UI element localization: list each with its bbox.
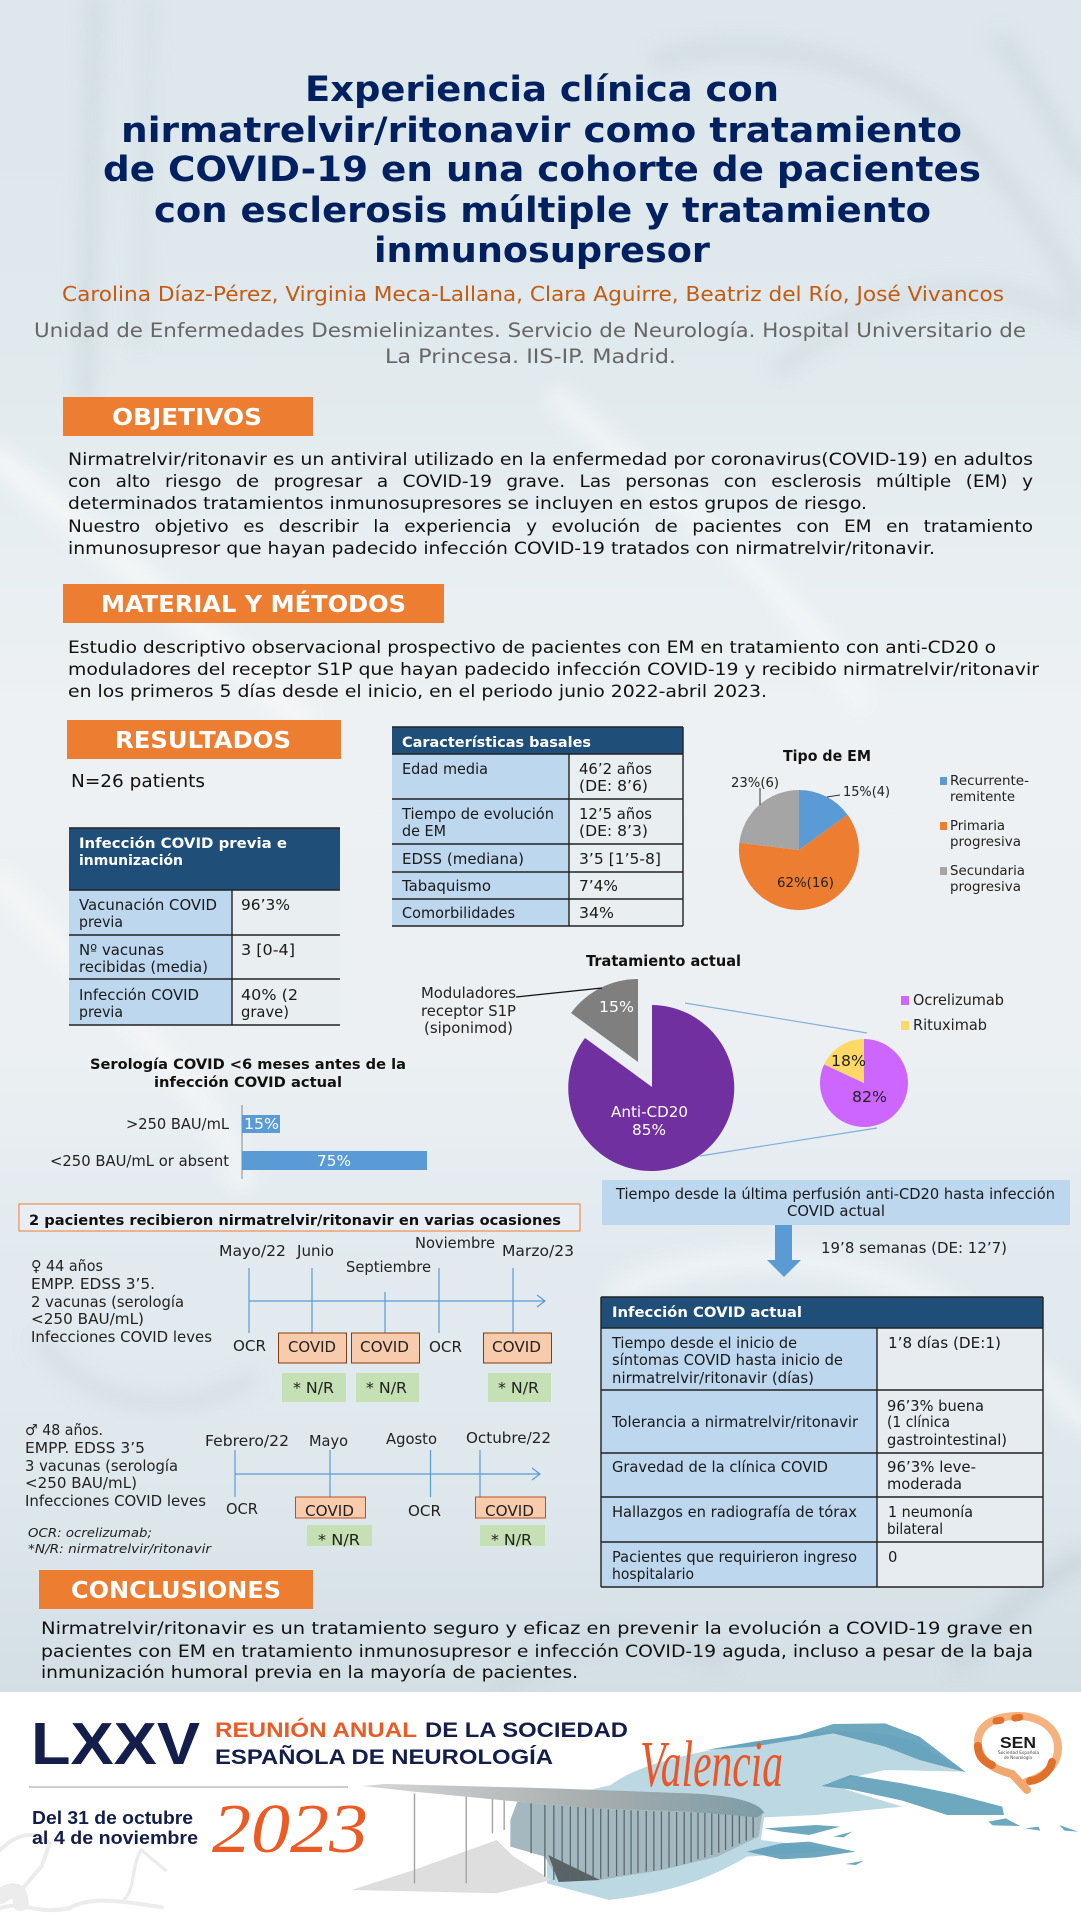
heading: objetivos: OBJETIVOS bbox=[112, 405, 262, 431]
patient 1 details bbox=[31, 1257, 212, 1346]
pie chart: tratamiento actual: receptor S1P bbox=[421, 1002, 516, 1020]
table: infección COVID previa e inmunización: inmunización bbox=[79, 852, 183, 869]
banner: congress footer bbox=[0, 1692, 1081, 1920]
year: 2023: 2023 bbox=[212, 1791, 368, 1868]
timeline: patient 1: OCR bbox=[233, 1337, 266, 1355]
patient 1 details: 2 vacunas (serología bbox=[31, 1293, 184, 1311]
callout: tiempo desde la última perfusión: COVID actual bbox=[787, 1203, 885, 1220]
table: características basales: Tabaquismo bbox=[401, 878, 491, 895]
table: características basales: Edad media bbox=[402, 761, 488, 778]
table: características basales: 12’5 años bbox=[579, 806, 652, 823]
timeline: patient 2: OCR bbox=[226, 1500, 258, 1518]
table: infección COVID actual bbox=[601, 1297, 1043, 1587]
result: semanas: 19’8 semanas (DE: 12’7) bbox=[821, 1239, 1007, 1257]
pie chart: tratamiento actual: 18% bbox=[831, 1052, 866, 1070]
text: conclusiones: pacientes con EM en tratamiento inmunosupresor e infección COVID-19 aguda, incluso a pesar de la baja bbox=[41, 1642, 1033, 1662]
heading: reunión anual: REUNIÓN ANUAL bbox=[215, 1718, 417, 1742]
affiliation: Unidad de Enfermedades Desmielinizantes. Servicio de Neurología. Hospital Universitario de bbox=[34, 319, 1026, 342]
timeline: patient 2: Mayo bbox=[309, 1432, 348, 1450]
table: infección COVID actual: Hallazgos en radiografía de tórax bbox=[612, 1504, 857, 1521]
timeline: patient 2: Agosto bbox=[386, 1430, 437, 1448]
text: objetivos: Nirmatrelvir/ritonavir es un antiviral utilizado en la enfermedad por coronavirus(COVID-19) en adultos bbox=[68, 450, 1033, 470]
pie chart: tratamiento actual: Rituximab bbox=[913, 1016, 987, 1034]
text: conclusiones: Nirmatrelvir/ritonavir es un tratamiento seguro y eficaz en prevenir la evolución a COVID-19 grave en bbox=[41, 1619, 1033, 1639]
heading: resultados: RESULTADOS bbox=[115, 728, 291, 754]
heading: reunión anual: ESPAÑOLA DE NEUROLOGÍA bbox=[215, 1746, 553, 1769]
heading: material y métodos: MATERIAL Y MÉTODOS bbox=[101, 590, 406, 618]
title: con esclerosis múltiple y tratamiento bbox=[154, 191, 931, 231]
callout: varias ocasiones bbox=[19, 1204, 580, 1231]
affiliation: La Princesa. IIS-IP. Madrid. bbox=[385, 345, 676, 368]
illustration: building bbox=[352, 1784, 764, 1893]
bar chart: serología COVID: 15% bbox=[244, 1115, 279, 1133]
table: características basales: Tiempo de evolución bbox=[401, 806, 554, 823]
title: inmunosupresor bbox=[374, 231, 711, 271]
timeline: patient 1: COVID bbox=[360, 1338, 409, 1356]
text: objetivos: con alto riesgo de progresar a COVID-19 grave. Las personas con esclerosis múltiple (EM) y bbox=[68, 472, 1033, 492]
table: infección COVID actual: Tolerancia a nirmatrelvir/ritonavir bbox=[611, 1414, 859, 1431]
table: características basales: (DE: 8’3) bbox=[579, 823, 648, 840]
dates: Del 31 de octubre bbox=[32, 1808, 193, 1828]
pie chart: tipo de EM bbox=[731, 747, 1029, 910]
text: objetivos: determinados tratamientos inmunosupresores se incluyen en estos grupos de riesgo. bbox=[68, 494, 867, 514]
timeline: patient 1: COVID bbox=[492, 1338, 541, 1356]
timeline: patient 1: Mayo/22 bbox=[219, 1242, 286, 1260]
table: infección COVID actual: Tiempo desde el inicio de bbox=[611, 1335, 797, 1352]
timeline: patient 2: Febrero/22 bbox=[205, 1432, 289, 1450]
bar chart: serología COVID: Serología COVID <6 meses antes de la bbox=[90, 1056, 406, 1073]
patient 2 details: EMPP. EDSS 3’5 bbox=[25, 1439, 145, 1457]
timeline: patient 2: Octubre/22 bbox=[466, 1429, 551, 1447]
bar chart: serología COVID bbox=[50, 1056, 427, 1179]
patient 2 details: 3 vacunas (serología bbox=[25, 1457, 178, 1475]
table: infección COVID previa e inmunización: recibidas (media) bbox=[79, 959, 208, 976]
table: infección COVID actual: gastrointestinal) bbox=[887, 1432, 1007, 1449]
table: características basales: 3’5 [1’5-8] bbox=[579, 851, 661, 868]
heading: conclusiones: CONCLUSIONES bbox=[71, 1578, 281, 1604]
table: infección COVID actual: hospitalario bbox=[612, 1566, 694, 1583]
table: características basales: 46’2 años bbox=[579, 761, 652, 778]
text: material y métodos: moduladores del receptor S1P que hayan padecido infección COVID-19 y recibido nirmatrelvir/ritonavir bbox=[68, 660, 1039, 680]
table: infección COVID actual: 1 neumonía bbox=[888, 1504, 973, 1521]
timeline: patient 1: Junio bbox=[296, 1242, 334, 1260]
table: características basales: de EM bbox=[402, 823, 446, 840]
patient 1 details: Infecciones COVID leves bbox=[31, 1328, 212, 1346]
table: infección COVID actual: Infección COVID actual bbox=[612, 1304, 802, 1321]
callout: tiempo desde la última perfusión bbox=[602, 1180, 1070, 1225]
table: infección COVID previa e inmunización: Vacunación COVID bbox=[79, 897, 217, 914]
pie chart: tratamiento actual: 85% bbox=[632, 1121, 666, 1139]
heading: resultados bbox=[67, 720, 341, 759]
pie chart: tratamiento actual: Tratamiento actual bbox=[586, 952, 741, 970]
text: material y métodos: Estudio descriptivo observacional prospectivo de pacientes con EM en tratamiento con anti-CD20 o bbox=[68, 638, 996, 658]
text: conclusiones bbox=[41, 1619, 1033, 1683]
timeline: patient 1: * N/R bbox=[498, 1379, 539, 1397]
title: Experiencia clínica con bbox=[305, 70, 779, 110]
pie chart: tipo de EM: 23%(6) bbox=[731, 776, 779, 791]
patient 1 details: <250 BAU/mL) bbox=[31, 1310, 144, 1328]
table: infección COVID previa e inmunización: 40% (2 bbox=[241, 987, 298, 1004]
dates: al 4 de noviembre bbox=[32, 1828, 198, 1848]
pie chart: tipo de EM: progresiva bbox=[950, 880, 1021, 895]
timeline: patient 1: COVID bbox=[288, 1338, 336, 1356]
table: características basales: EDSS (mediana) bbox=[402, 851, 524, 868]
heading: conclusiones bbox=[39, 1570, 313, 1609]
pie chart: tipo de EM: Recurrente- bbox=[950, 774, 1029, 789]
patient 1 details: ♀ 44 años bbox=[31, 1257, 103, 1275]
timeline: patient 2: COVID bbox=[305, 1502, 354, 1520]
illustration: watercolor bbox=[547, 1723, 1078, 1900]
logo: SEN bbox=[978, 1716, 1058, 1790]
patient 1 details: EMPP. EDSS 3’5. bbox=[31, 1275, 155, 1293]
dates bbox=[32, 1808, 198, 1848]
pie chart: tratamiento actual: 15% bbox=[599, 998, 634, 1016]
text: conclusiones: inmunización humoral previa en la mayoría de pacientes. bbox=[41, 1663, 578, 1683]
heading: material y métodos bbox=[63, 584, 444, 623]
title bbox=[103, 70, 981, 271]
pie chart: tipo de EM: remitente bbox=[950, 790, 1015, 805]
timeline: patient 2: * N/R bbox=[318, 1531, 360, 1549]
table: infección COVID actual: 96’3% leve- bbox=[887, 1459, 976, 1476]
timeline: patient 1: OCR bbox=[429, 1338, 462, 1356]
bar chart: serología COVID: <250 BAU/mL or absent bbox=[50, 1152, 229, 1170]
timeline: patient 1: * N/R bbox=[293, 1379, 334, 1397]
bar chart: serología COVID: >250 BAU/mL bbox=[126, 1115, 230, 1133]
text: material y métodos: en los primeros 5 días desde el inicio, en el periodo junio 2022-abril 2023. bbox=[68, 682, 767, 702]
callout: varias ocasiones: 2 pacientes recibieron nirmatrelvir/ritonavir en varias ocasiones bbox=[29, 1212, 561, 1229]
heading: reunión anual: DE LA SOCIEDAD bbox=[425, 1719, 628, 1742]
table: infección COVID actual: Gravedad de la clínica COVID bbox=[612, 1459, 828, 1476]
pie chart: tratamiento actual: Anti-CD20 bbox=[611, 1103, 688, 1121]
pie chart: tipo de EM: progresiva bbox=[950, 835, 1021, 850]
table: infección COVID previa e inmunización: Infección COVID previa e bbox=[79, 835, 287, 852]
text: objetivos: Nuestro objetivo es describir la experiencia y evolución de pacientes con EM en tratamiento bbox=[68, 517, 1033, 537]
table: características basales bbox=[392, 727, 683, 926]
table: infección COVID previa e inmunización: grave) bbox=[241, 1004, 289, 1021]
table: infección COVID previa e inmunización: Infección COVID bbox=[79, 987, 199, 1004]
table: infección COVID previa e inmunización: Nº vacunas bbox=[79, 942, 164, 959]
footnote: abbreviations bbox=[28, 1525, 212, 1556]
heading: reunión anual bbox=[215, 1718, 628, 1769]
authors: Carolina Díaz-Pérez, Virginia Meca-Lallana, Clara Aguirre, Beatriz del Río, José Vivancos bbox=[62, 282, 1004, 306]
heading: objetivos bbox=[63, 397, 313, 436]
pie chart: tratamiento actual: Moduladores bbox=[421, 984, 516, 1002]
patient 2 details bbox=[25, 1421, 206, 1510]
logo: SEN: SEN bbox=[1000, 1735, 1036, 1752]
table: infección COVID previa e inmunización: 96’3% bbox=[241, 897, 290, 914]
timeline: patient 1: * N/R bbox=[366, 1379, 407, 1397]
table: infección COVID actual: síntomas COVID hasta inicio de bbox=[612, 1352, 843, 1369]
table: infección COVID previa e inmunización bbox=[69, 828, 340, 1025]
table: características basales: Características basales bbox=[402, 734, 591, 751]
table: infección COVID actual: nirmatrelvir/ritonavir (días) bbox=[612, 1370, 814, 1387]
patient 2 details: ♂ 48 años. bbox=[25, 1421, 103, 1439]
text: objetivos: inmunosupresor que hayan padecido infección COVID-19 tratados con nirmatrelvir/ritonavir. bbox=[68, 539, 935, 559]
arrow: down bbox=[767, 1225, 801, 1277]
title: nirmatrelvir/ritonavir como tratamiento bbox=[121, 111, 962, 151]
callout: tiempo desde la última perfusión: Tiempo desde la última perfusión anti-CD20 hasta infección bbox=[615, 1186, 1055, 1203]
table: características basales: (DE: 8’6) bbox=[579, 778, 648, 795]
table: infección COVID actual: (1 clínica bbox=[887, 1414, 950, 1431]
timeline: patient 1: Septiembre bbox=[346, 1258, 431, 1276]
text: material y métodos bbox=[68, 638, 1039, 702]
pie chart: tipo de EM: Secundaria bbox=[950, 864, 1025, 879]
patient 2 details: Infecciones COVID leves bbox=[25, 1492, 206, 1510]
logo: SEN: Sociedad Española bbox=[998, 1750, 1040, 1755]
table: infección COVID actual: 1’8 días (DE:1) bbox=[888, 1335, 1001, 1352]
heading: LXXV: LXXV bbox=[31, 1711, 200, 1777]
pie chart: tratamiento actual bbox=[421, 952, 1004, 1171]
affiliation bbox=[34, 319, 1026, 368]
pie chart: tipo de EM: 62%(16) bbox=[777, 876, 834, 891]
table: características basales: Comorbilidades bbox=[402, 905, 515, 922]
table: infección COVID actual: moderada bbox=[887, 1476, 962, 1493]
table: características basales: 34% bbox=[579, 905, 614, 922]
pie chart: tipo de EM: 15%(4) bbox=[843, 785, 890, 800]
table: características basales: 7’4% bbox=[579, 878, 618, 895]
timeline: patient 1: Marzo/23 bbox=[502, 1242, 574, 1260]
logo: SEN: de Neurología bbox=[1004, 1755, 1033, 1760]
timeline: patient 1: Noviembre bbox=[415, 1234, 495, 1252]
table: infección COVID actual: Pacientes que requirieron ingreso bbox=[612, 1549, 857, 1566]
timeline: patient 2: COVID bbox=[485, 1502, 534, 1520]
pie chart: tratamiento actual: 82% bbox=[852, 1088, 887, 1106]
pie chart: tipo de EM: Primaria bbox=[950, 819, 1005, 834]
pie chart: tratamiento actual: Ocrelizumab bbox=[913, 991, 1004, 1009]
footnote: abbreviations: OCR: ocrelizumab; bbox=[28, 1525, 152, 1540]
table: infección COVID previa e inmunización: 3 [0-4] bbox=[241, 942, 295, 959]
pie chart: tipo de EM: Tipo de EM bbox=[783, 747, 871, 765]
table: infección COVID actual: 0 bbox=[888, 1549, 897, 1566]
timeline: patient 2: * N/R bbox=[491, 1531, 532, 1549]
title: de COVID-19 en una cohorte de pacientes bbox=[103, 150, 981, 190]
pie chart: tratamiento actual: (siponimod) bbox=[424, 1019, 513, 1037]
decoration: grey river map bbox=[0, 1835, 165, 1910]
bar chart: serología COVID: 75% bbox=[317, 1152, 351, 1170]
sample size: N=26 patients bbox=[71, 771, 205, 792]
bar chart: serología COVID: infección COVID actual bbox=[154, 1074, 342, 1091]
city: Valencia: Valencia bbox=[640, 1728, 783, 1801]
patient 2 details: <250 BAU/mL) bbox=[25, 1474, 137, 1492]
text: objetivos bbox=[68, 450, 1033, 559]
timeline: patient 2: OCR bbox=[408, 1502, 441, 1520]
table: infección COVID actual: 96’3% buena bbox=[887, 1398, 984, 1415]
table: infección COVID previa e inmunización: previa bbox=[79, 914, 123, 931]
table: infección COVID actual: bilateral bbox=[887, 1521, 943, 1538]
table: infección COVID previa e inmunización: previa bbox=[79, 1004, 123, 1021]
timeline: patient 1 bbox=[219, 1234, 574, 1402]
timeline: patient 2 bbox=[205, 1429, 551, 1549]
footnote: abbreviations: *N/R: nirmatrelvir/ritonavir bbox=[28, 1541, 212, 1556]
